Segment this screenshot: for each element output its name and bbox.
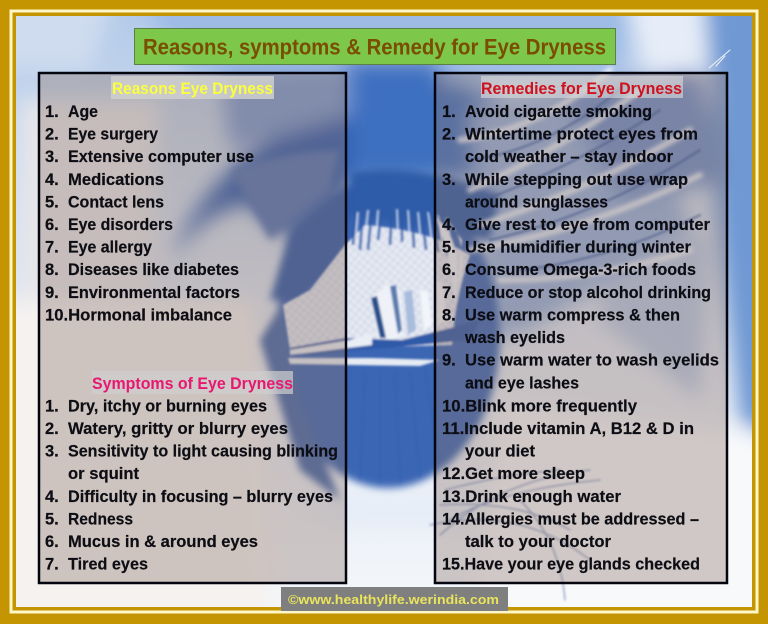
list: remedies: Consume Omega-3-rich foods <box>465 261 696 279</box>
website credit: ©www.healthylife.werindia.com <box>288 592 499 607</box>
list: symptoms: Sensitivity to light causing blinking <box>68 443 338 461</box>
list: reasons: Medications <box>68 171 164 189</box>
list: remedies: Give rest to eye from computer <box>465 216 711 234</box>
lashes at upper right <box>430 50 730 600</box>
website credit <box>281 587 508 611</box>
list: symptoms: 2. <box>45 420 59 438</box>
list: remedies: 13.Drink enough water <box>442 488 622 506</box>
title banner: Reasons, symptoms & Remedy for Eye Dryness <box>143 34 606 60</box>
list: remedies: and eye lashes <box>465 375 579 393</box>
list: remedies: your diet <box>465 443 535 461</box>
list: reasons: 3. <box>45 148 59 166</box>
outer dark socket around the iris <box>276 182 500 488</box>
list: symptoms: Tired eyes <box>68 556 148 574</box>
list: reasons: 1. <box>45 103 59 121</box>
lower iris rays <box>340 370 440 484</box>
list: remedies: 12.Get more sleep <box>442 465 585 483</box>
list: reasons: 6. <box>45 216 59 234</box>
list: remedies: 1. <box>442 103 456 121</box>
list: reasons: Age <box>68 103 98 121</box>
lashes at lower right <box>430 470 600 600</box>
list: remedies <box>442 103 719 574</box>
list: symptoms: 6. <box>45 533 59 551</box>
upper lashes reflection <box>353 207 448 256</box>
list: reasons: Eye allergy <box>68 239 153 257</box>
list: reasons: 2. <box>45 126 59 144</box>
list: remedies: around sunglasses <box>465 193 608 211</box>
list: remedies: 5. <box>442 239 456 257</box>
list: reasons: Eye disorders <box>68 216 173 234</box>
list: reasons: Contact lens <box>68 193 164 211</box>
list: symptoms: 1. <box>45 398 59 416</box>
list: reasons: 9. <box>45 284 59 302</box>
list: symptoms: Redness <box>68 510 133 528</box>
list: symptoms: Difficulty in focusing – blurry eyes <box>68 488 333 506</box>
list: symptoms: 7. <box>45 556 59 574</box>
list: remedies: 7. <box>442 284 456 302</box>
list: remedies: Wintertime protect eyes from <box>465 126 698 144</box>
list: reasons: Environmental factors <box>68 284 240 302</box>
list: reasons: 7. <box>45 239 59 257</box>
list: symptoms: Watery, gritty or blurry eyes <box>68 420 288 438</box>
heading: remedies: Remedies for Eye Dryness <box>481 80 682 98</box>
list: remedies: Avoid cigarette smoking <box>465 103 652 121</box>
list: reasons: Diseases like diabetes <box>68 261 239 279</box>
list: reasons: 10.Hormonal imbalance <box>45 306 232 324</box>
list: remedies: Reduce or stop alcohol drinking <box>465 284 711 302</box>
list: remedies: 6. <box>442 261 456 279</box>
list: symptoms: or squint <box>68 465 140 483</box>
panel: reasons and symptoms <box>39 73 346 583</box>
white upper-lash streak near iris <box>436 218 457 291</box>
list: symptoms: 4. <box>45 488 59 506</box>
list: remedies: 3. <box>442 171 456 189</box>
title banner <box>134 28 616 64</box>
list: symptoms: Mucus in & around eyes <box>68 533 258 551</box>
heading: symptoms: Symptoms of Eye Dryness <box>92 375 293 393</box>
list: remedies: 2. <box>442 126 456 144</box>
list: symptoms: Dry, itchy or burning eyes <box>68 398 267 416</box>
list: remedies: Use warm compress & then <box>465 306 680 324</box>
list: remedies: Use warm water to wash eyelids <box>465 352 719 370</box>
list: remedies: talk to your doctor <box>465 533 612 551</box>
list: reasons: 8. <box>45 261 59 279</box>
list: remedies: 14.Allergies must be addressed – <box>442 510 699 528</box>
list: remedies: 4. <box>442 216 456 234</box>
list: reasons: Extensive computer use <box>68 148 254 166</box>
list: reasons: 4. <box>45 171 59 189</box>
iris reflection <box>283 225 470 350</box>
list: remedies: 15.Have your eye glands checked <box>442 556 700 574</box>
list: reasons: 5. <box>45 193 59 211</box>
heading: reasons: Reasons Eye Dryness <box>112 80 273 98</box>
horizon bands <box>289 324 468 354</box>
list: symptoms: 3. <box>45 443 59 461</box>
list: remedies: cold weather – stay indoor <box>465 148 674 166</box>
list: reasons <box>45 103 254 324</box>
city reflection <box>375 284 404 340</box>
list: symptoms: 5. <box>45 510 59 528</box>
list: symptoms <box>45 398 338 574</box>
panel: remedies <box>435 73 727 583</box>
list: reasons: Eye surgery <box>68 126 159 144</box>
list: remedies: wash eyelids <box>464 329 565 347</box>
list: remedies: Use humidifier during winter <box>465 239 692 257</box>
list: remedies: 11.Include vitamin A, B12 & D in <box>442 420 694 438</box>
list: remedies: 10.Blink more frequently <box>442 398 638 416</box>
list: remedies: While stepping out use wrap <box>465 171 688 189</box>
list: remedies: 8. <box>442 306 456 324</box>
list: remedies: 9. <box>442 352 456 370</box>
